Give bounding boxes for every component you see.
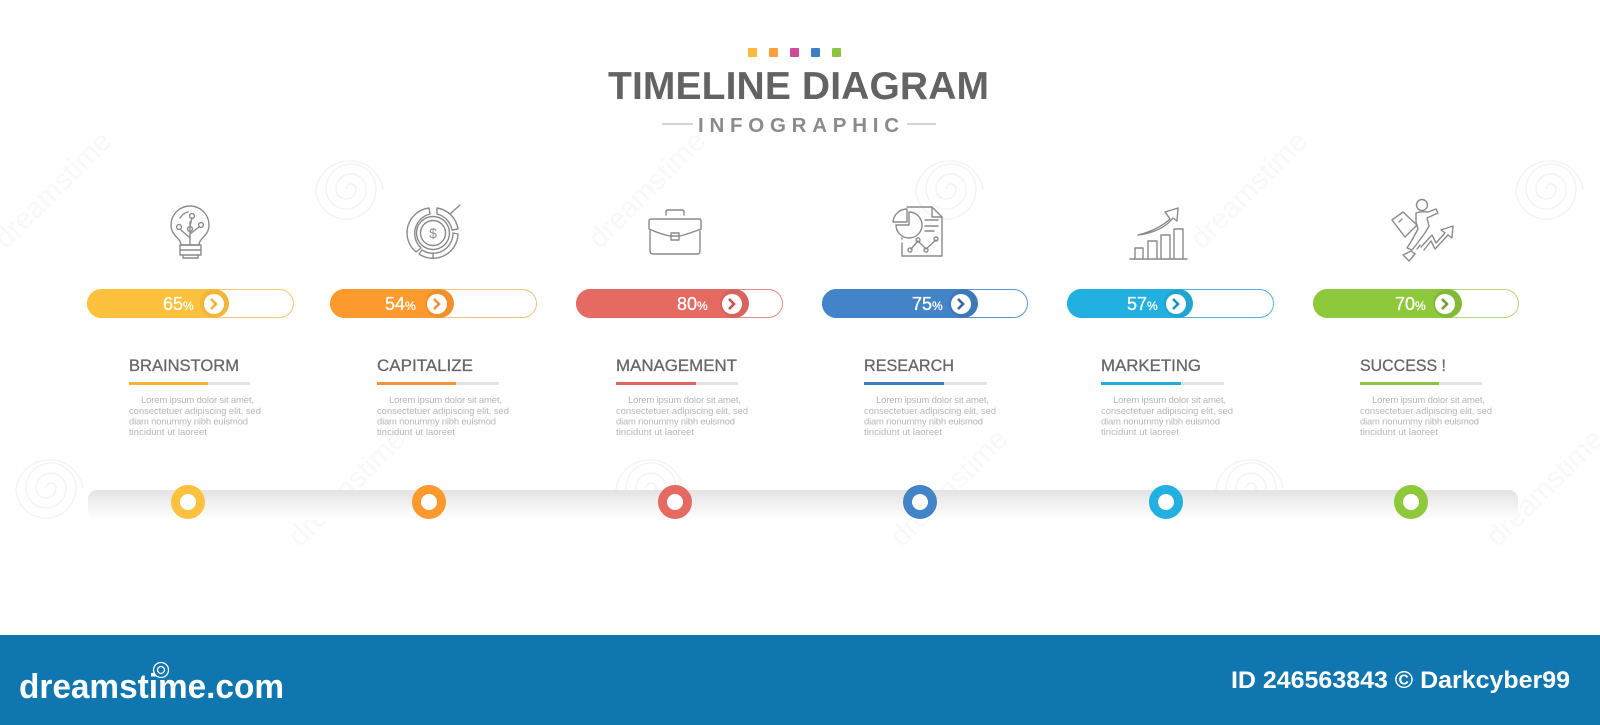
description: consectetuer adipiscing elit, sed (1360, 406, 1492, 417)
watermark layer (0, 125, 1600, 553)
description: Lorem ipsum dolor sit amet, (1113, 395, 1226, 406)
description: Lorem ipsum dolor sit amet, (141, 395, 254, 406)
description (377, 395, 509, 438)
subtitle: INFOGRAPHIC (698, 114, 899, 137)
heading: MARKETING (1101, 356, 1201, 375)
icon: target with dollar (407, 205, 460, 258)
header (608, 48, 989, 137)
description (616, 395, 748, 438)
progress bar 65%: 65% (163, 294, 194, 314)
description (1101, 395, 1233, 438)
description: diam nonummy nibh euismod (1101, 416, 1220, 428)
panel: capitalize (330, 205, 536, 438)
panel: brainstorm (87, 206, 294, 438)
progress bar 54% (330, 289, 536, 318)
description: tincidunt ut laoreet (864, 427, 942, 438)
panel: management (576, 210, 782, 438)
icon: briefcase (649, 210, 701, 254)
progress bar 80% (576, 289, 782, 318)
description: consectetuer adipiscing elit, sed (377, 406, 509, 417)
description: diam nonummy nibh euismod (864, 416, 983, 428)
footer band (0, 635, 1600, 725)
watermark layer: dreamstime (1184, 125, 1314, 255)
timeline (88, 490, 1518, 520)
description: consectetuer adipiscing elit, sed (616, 406, 748, 417)
description (864, 395, 996, 438)
description: diam nonummy nibh euismod (1360, 416, 1479, 428)
timeline track (88, 490, 1518, 520)
icon: growth chart (1130, 208, 1187, 259)
icon: report document (893, 207, 942, 256)
underline (1101, 382, 1224, 385)
progress bar 70% (1313, 289, 1518, 318)
description: diam nonummy nibh euismod (129, 416, 248, 428)
watermark layer: dreamstime (582, 125, 712, 255)
heading: CAPITALIZE (377, 356, 473, 375)
underline (864, 382, 987, 385)
description: diam nonummy nibh euismod (377, 416, 496, 428)
underline (129, 382, 250, 385)
description (1360, 395, 1492, 438)
description: tincidunt ut laoreet (1360, 427, 1438, 438)
description: tincidunt ut laoreet (616, 427, 694, 438)
description: consectetuer adipiscing elit, sed (864, 406, 996, 417)
progress bar 54%: 54% (385, 294, 416, 314)
description: tincidunt ut laoreet (129, 427, 207, 438)
heading: MANAGEMENT (616, 356, 737, 375)
title: TIMELINE DIAGRAM (608, 65, 989, 108)
description: Lorem ipsum dolor sit amet, (628, 395, 741, 406)
progress bar 70%: 70% (1395, 294, 1426, 314)
heading: RESEARCH (864, 356, 954, 375)
description: Lorem ipsum dolor sit amet, (389, 395, 502, 406)
progress bar 80%: 80% (677, 294, 708, 314)
heading: BRAINSTORM (129, 356, 239, 375)
progress bar 75%: 75% (912, 294, 943, 314)
panel: success (1313, 200, 1518, 438)
description: diam nonummy nibh euismod (616, 416, 735, 428)
underline (616, 382, 738, 385)
icon: running businessman (1392, 200, 1453, 261)
description: consectetuer adipiscing elit, sed (129, 406, 261, 417)
description: consectetuer adipiscing elit, sed (1101, 406, 1233, 417)
panel: marketing (1067, 208, 1274, 438)
progress bar 57%: 57% (1127, 294, 1158, 314)
description: tincidunt ut laoreet (377, 427, 455, 438)
timeline markers (176, 490, 1424, 514)
description: Lorem ipsum dolor sit amet, (876, 395, 989, 406)
icon: light bulb (171, 206, 209, 258)
description (129, 395, 261, 438)
watermark layer: dreamstime (884, 423, 1014, 553)
heading: SUCCESS ! (1360, 356, 1446, 375)
colour squares (748, 48, 841, 57)
icon: target with dollar: $ (429, 225, 437, 241)
description: tincidunt ut laoreet (1101, 427, 1179, 438)
underline (1360, 382, 1482, 385)
description: Lorem ipsum dolor sit amet, (1372, 395, 1485, 406)
watermark layer: dreamstime (282, 423, 412, 553)
logo: dreamstime.com (19, 668, 284, 706)
image id and credit: ID 246563843 © Darkcyber99 (1231, 667, 1570, 694)
progress bar 65% (87, 289, 294, 318)
panel: research (822, 207, 1028, 438)
progress bar 57% (1067, 289, 1274, 318)
progress bar 75% (822, 289, 1028, 318)
underline (377, 382, 499, 385)
